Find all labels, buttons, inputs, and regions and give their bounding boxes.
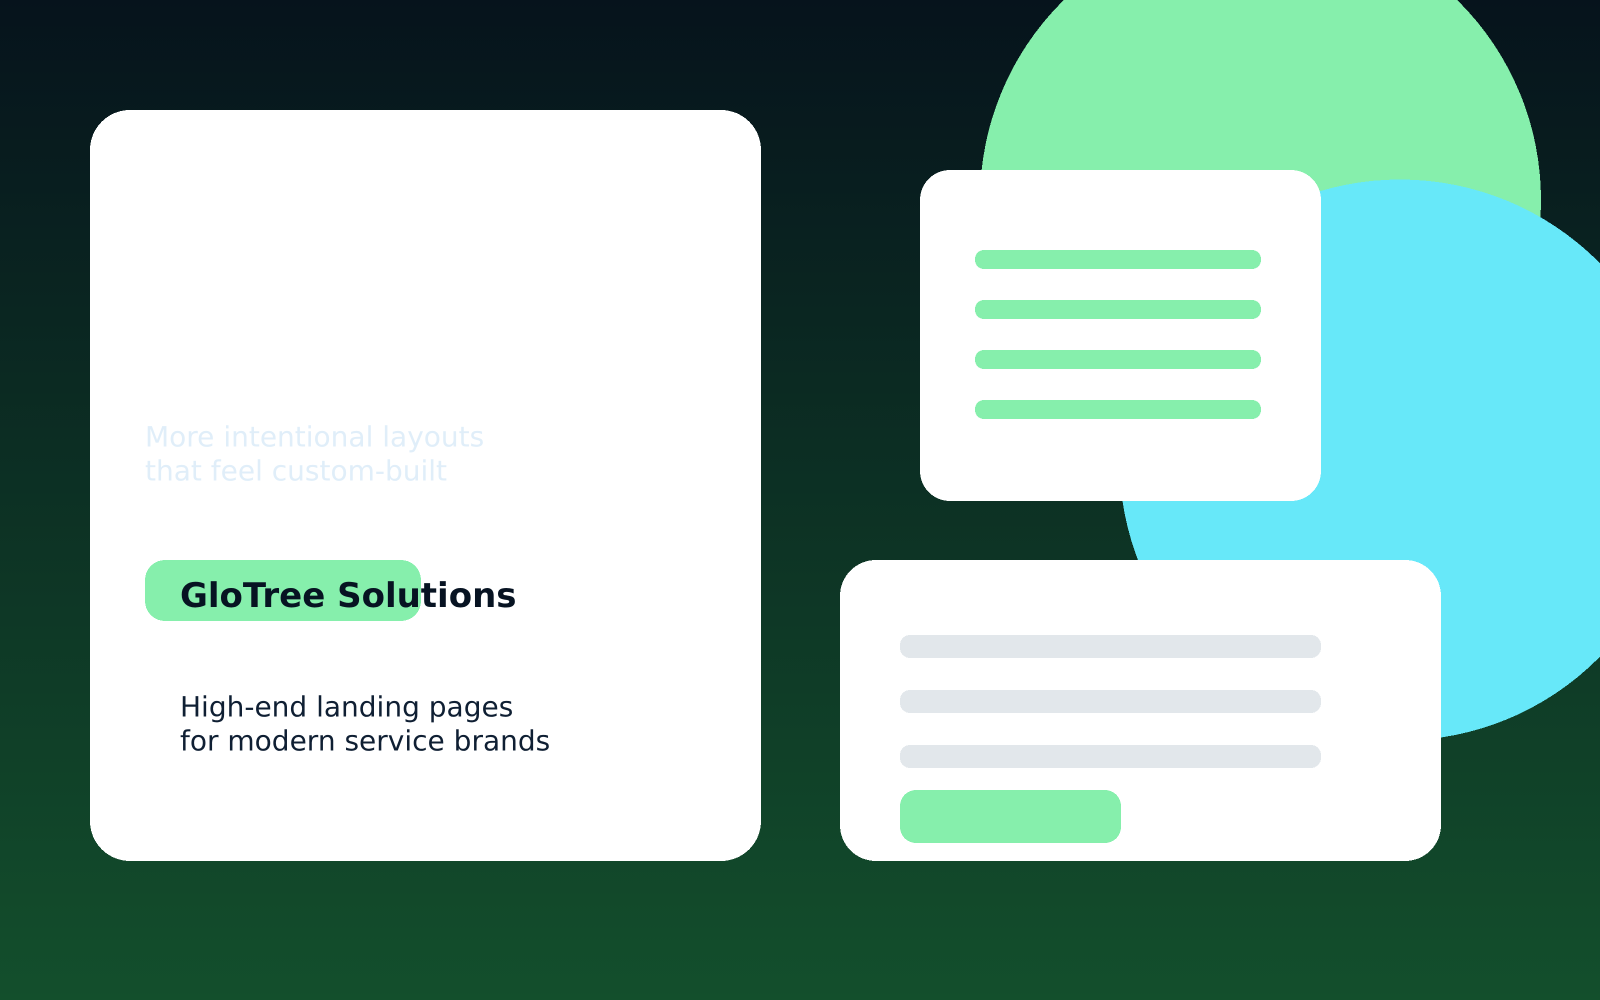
grey field bars: [900, 635, 1321, 768]
description text: for modern service brands: [180, 724, 550, 758]
decorative green circle: [980, 0, 1541, 480]
card background: [840, 560, 1441, 861]
tagline text: that feel custom-built: [145, 454, 447, 488]
card background: [920, 170, 1321, 501]
green button: [900, 790, 1121, 843]
card background: [90, 110, 761, 861]
tagline text: More intentional layouts: [145, 420, 484, 454]
panel: bottom right form card: [840, 560, 1441, 861]
description text: High-end landing pages: [180, 690, 513, 724]
panel: left hero card: [90, 110, 761, 861]
panel: top right mock card: [920, 170, 1321, 501]
brand pill: [145, 560, 421, 621]
brand name: GloTree Solutions: [180, 576, 517, 616]
green list bars: [975, 250, 1261, 419]
decorative cyan circle: [1120, 180, 1600, 740]
